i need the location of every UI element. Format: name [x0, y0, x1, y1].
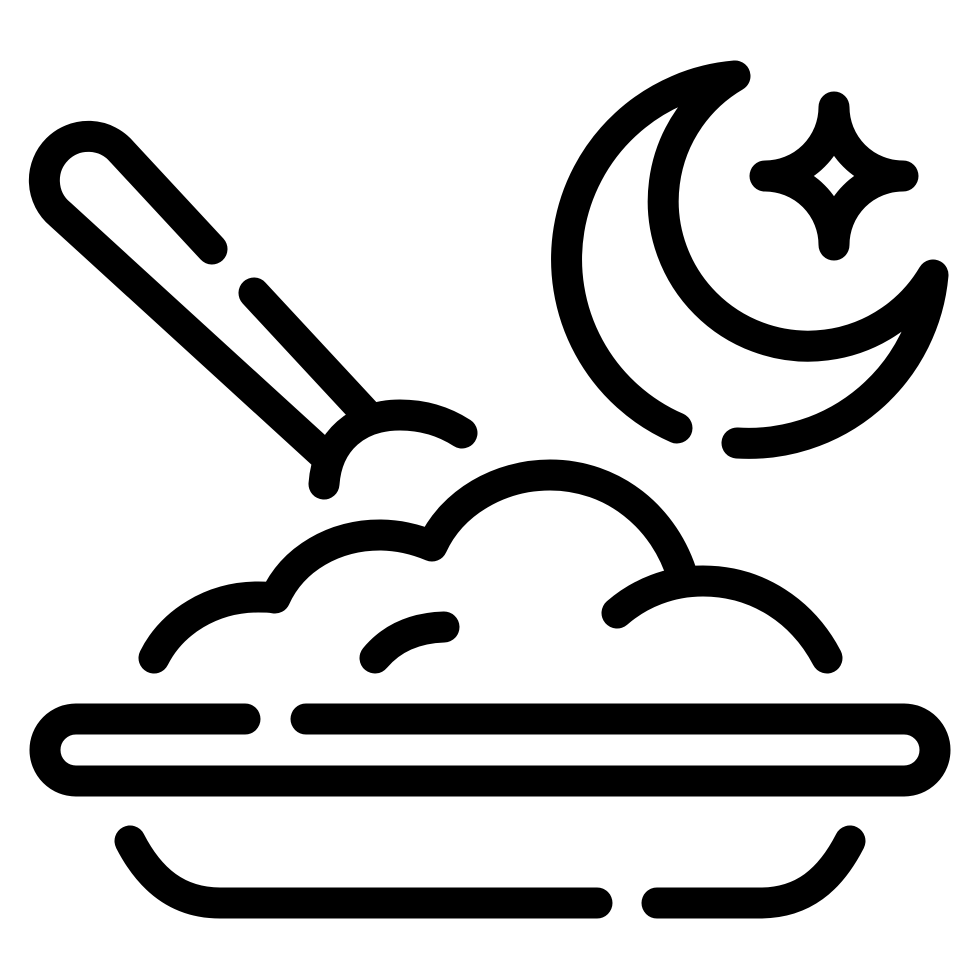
- icon: spoon: [44, 136, 462, 484]
- icon: food mound: [154, 475, 827, 658]
- icon: four-point star: [765, 107, 903, 245]
- icon: crescent moon: [567, 76, 933, 443]
- icon: plate base: [130, 841, 850, 903]
- icon: plate rim: [45, 719, 935, 781]
